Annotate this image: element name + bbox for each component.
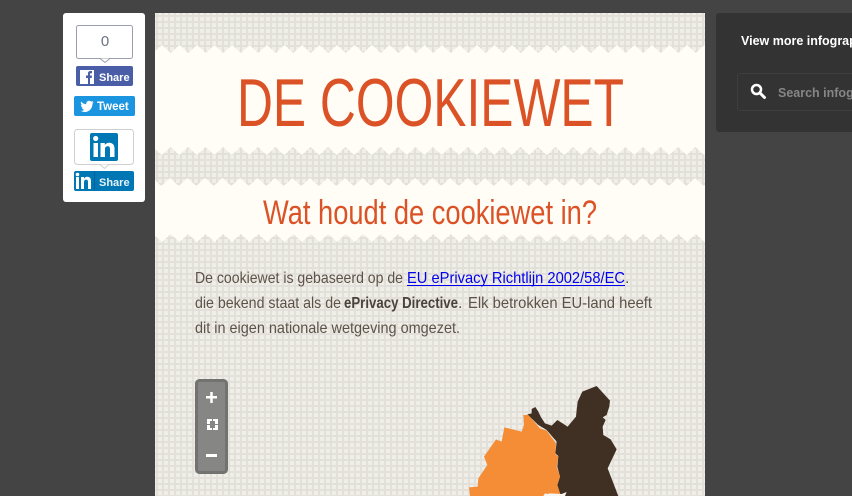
panel: share sidebar [63,13,145,202]
panel: more infographics [716,13,852,132]
linkedin share button [74,171,134,191]
facebook share button: Share [99,72,130,84]
tweet button: Tweet [97,101,129,113]
title banner [155,45,705,155]
icon: zoom in [206,392,217,403]
linkedin share button: Share [99,177,130,189]
map zoom control [196,380,226,472]
linkedin share count [74,130,134,168]
map: islands [543,492,567,496]
facebook share count: 0 [101,33,109,50]
subtitle banner [155,178,705,242]
link: EU ePrivacy Richtlijn: EU ePrivacy Richtlijn 2002/58/EC [407,270,625,287]
facebook share count [76,26,132,62]
intro text block [195,270,653,337]
panel: infographic [155,13,705,496]
subtitle: Wat houdt de cookiewet in? [263,194,597,232]
map: Finland [527,386,618,496]
intro text block: dit in eigen nationale wetgeving omgezet. [195,320,460,337]
icon: reset view [207,419,218,430]
icon: zoom out [206,454,217,457]
icon: search [750,84,766,100]
intro text block: die bekend staat als de [195,295,341,312]
intro text block: De cookiewet is gebaseerd op de [195,270,403,287]
intro text block: ePrivacy Directive [344,295,458,312]
intro text block: . [458,295,462,312]
map of Europe [469,386,618,496]
map: Sweden [469,415,561,496]
intro text block: . [625,270,629,287]
intro text block: Elk betrokken EU-land heeft [468,295,653,312]
search box [737,73,852,111]
facebook share button [76,66,133,86]
tweet button [74,96,135,116]
